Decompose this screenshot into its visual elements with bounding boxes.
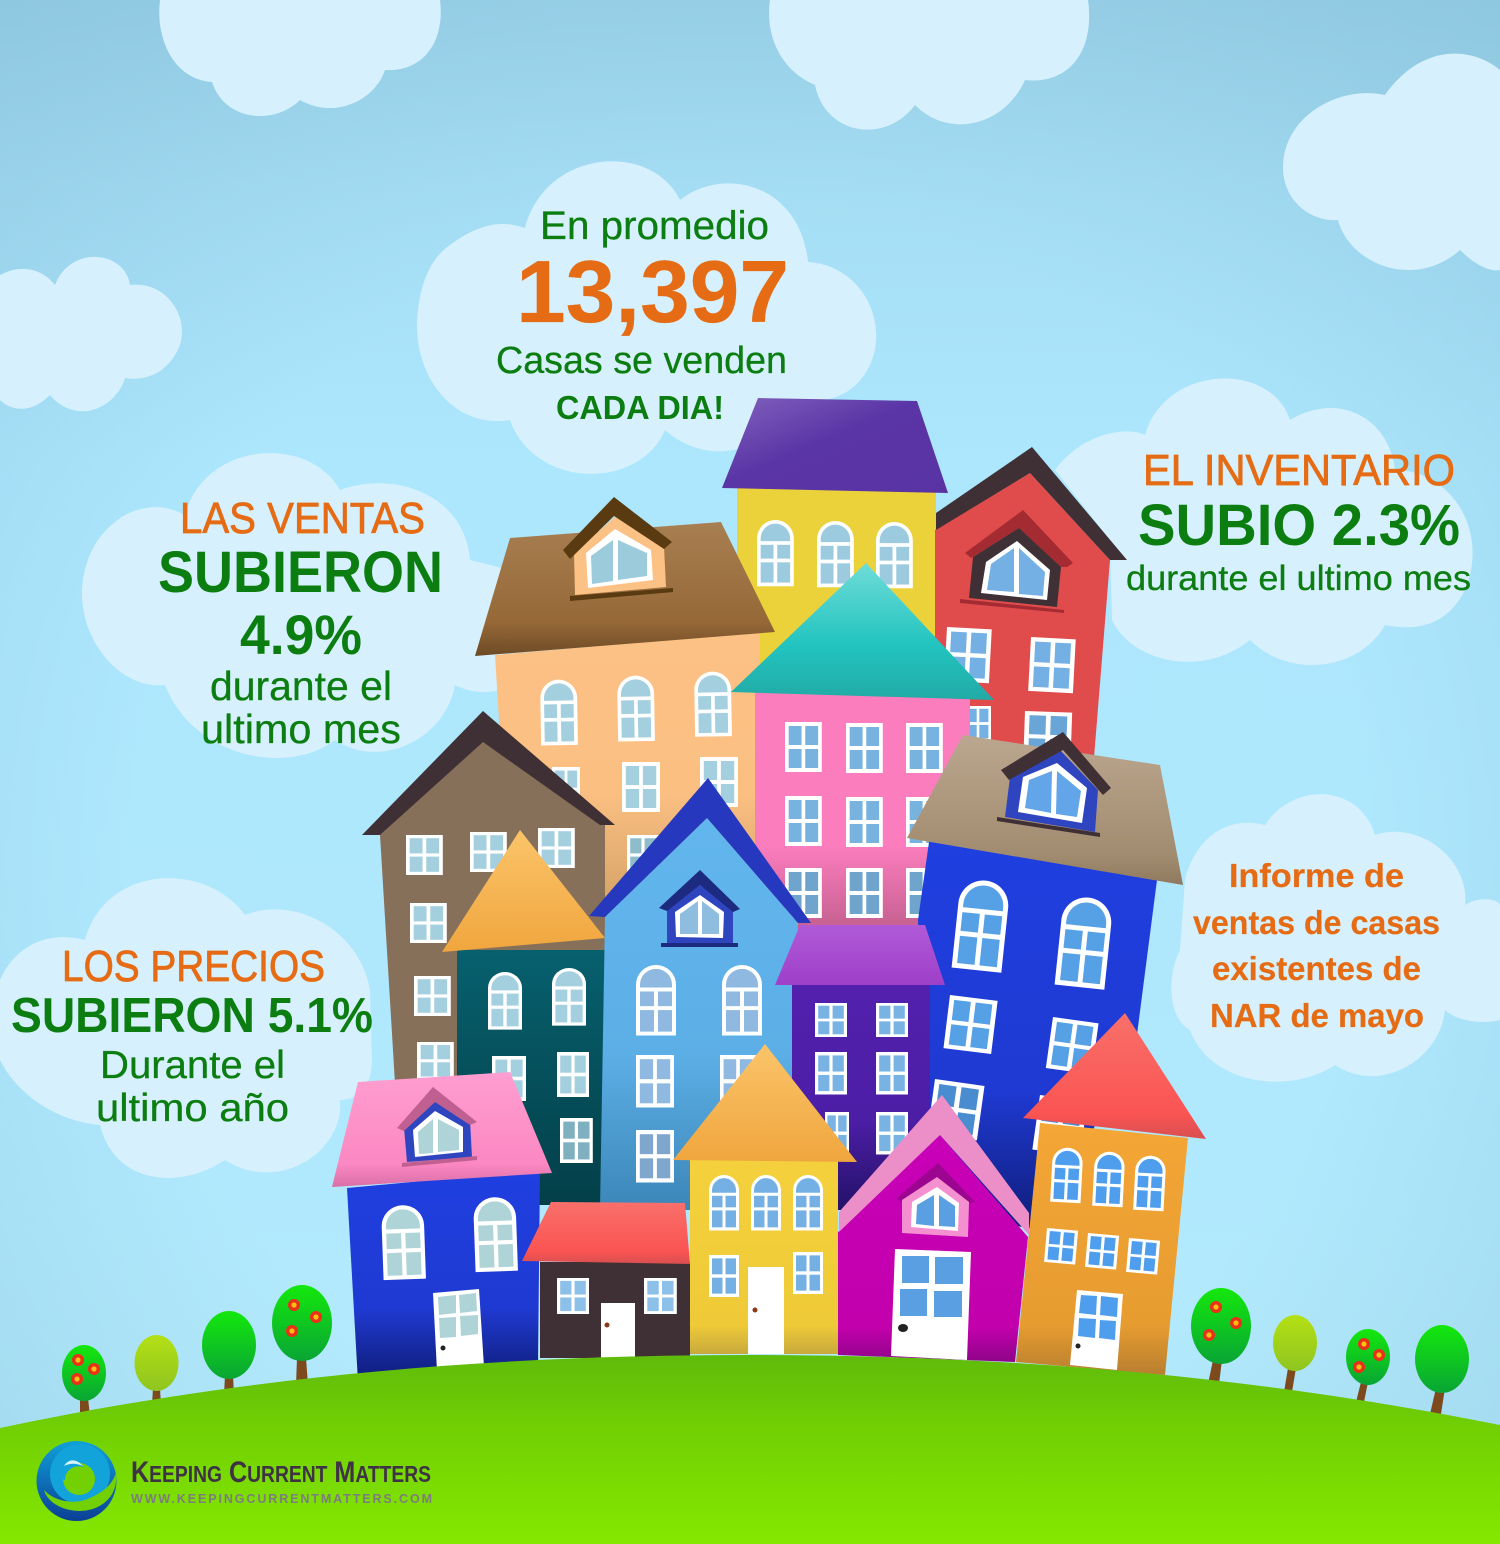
cloud: left (0, 257, 182, 411)
text: durante el: durante el (210, 663, 392, 709)
callout: homes sold per day (496, 204, 789, 426)
house: big blue with tan roof (907, 732, 1183, 1230)
logo url: WWW.KEEPINGCURRENTMATTERS.COM (131, 1492, 432, 1506)
cloud: left middle (82, 453, 510, 758)
tree 1 (62, 1345, 106, 1416)
cloud: top left (159, 0, 441, 116)
callout: prices (11, 942, 373, 1130)
text: subieron: SUBIERON (158, 540, 443, 605)
text: durante el ultimo mes: durante el ultimo mes (1126, 559, 1471, 598)
house: dark with red roof (522, 1202, 690, 1358)
text: subio 2.3%: SUBIO 2.3% (1138, 493, 1460, 558)
number: 13,397: 13,397 (516, 242, 789, 341)
hill trees (62, 1285, 1469, 1416)
text: ventas de casas: ventas de casas (1193, 904, 1440, 941)
green hill (0, 1355, 1500, 1544)
text: informe de: Informe de (1229, 857, 1404, 894)
cloud: right middle (1055, 378, 1473, 665)
number: 4.9%: 4.9% (240, 603, 362, 666)
tree 7 (1346, 1329, 1390, 1402)
tree 3 (202, 1311, 256, 1395)
text: los precios: LOS PRECIOS (62, 942, 325, 991)
tree 5 (1191, 1288, 1251, 1384)
cloud: center (417, 161, 876, 474)
cloud: left low (0, 878, 372, 1178)
tree 6 (1273, 1315, 1317, 1392)
cloud: top middle (769, 0, 1089, 130)
text: casas se venden: Casas se venden (496, 340, 787, 382)
cloud: top right (1283, 54, 1500, 270)
logo wordmark: KEEPING CURRENT MATTERS (131, 1456, 431, 1489)
house: purple (775, 925, 945, 1210)
house: peach with brown roof (475, 497, 775, 900)
text: cada dia: CADA DIA! (556, 389, 724, 426)
text: en promedio: En promedio (540, 204, 769, 248)
callout: sales (158, 494, 443, 752)
house: teal with orange roof (442, 830, 605, 1205)
house: yellow with orange roof (673, 1044, 857, 1354)
text: existentes de: existentes de (1212, 950, 1421, 987)
house: magenta (838, 1095, 1029, 1362)
text: las ventas: LAS VENTAS (180, 494, 425, 543)
house: red (935, 447, 1127, 770)
text: ultimo año: ultimo año (96, 1087, 289, 1130)
tree 8 (1415, 1325, 1469, 1414)
house: pink with teal roof (731, 563, 994, 930)
logo: Keeping Current Matters (36, 1441, 432, 1521)
text: subieron 5.1%: SUBIERON 5.1% (11, 989, 373, 1043)
house: orange with red roof (1016, 1013, 1206, 1375)
tree 4 (272, 1285, 332, 1385)
cloud: right low (1171, 794, 1500, 1082)
text: ultimo mes: ultimo mes (201, 706, 401, 752)
text: el inventario: EL INVENTARIO (1143, 446, 1455, 495)
house: yellow with purple roof (722, 398, 948, 700)
house: light blue (589, 778, 811, 1210)
tree 2 (134, 1335, 178, 1405)
callout: report source (1193, 857, 1440, 1034)
text: durante el: Durante el (100, 1044, 285, 1087)
text: nar de mayo: NAR de mayo (1210, 997, 1424, 1034)
icon: swirl globe (36, 1441, 116, 1521)
callout: inventory (1126, 446, 1471, 598)
house: brown (362, 711, 615, 1100)
house: blue with pink roof (332, 1072, 552, 1382)
houses cluster (332, 398, 1206, 1382)
